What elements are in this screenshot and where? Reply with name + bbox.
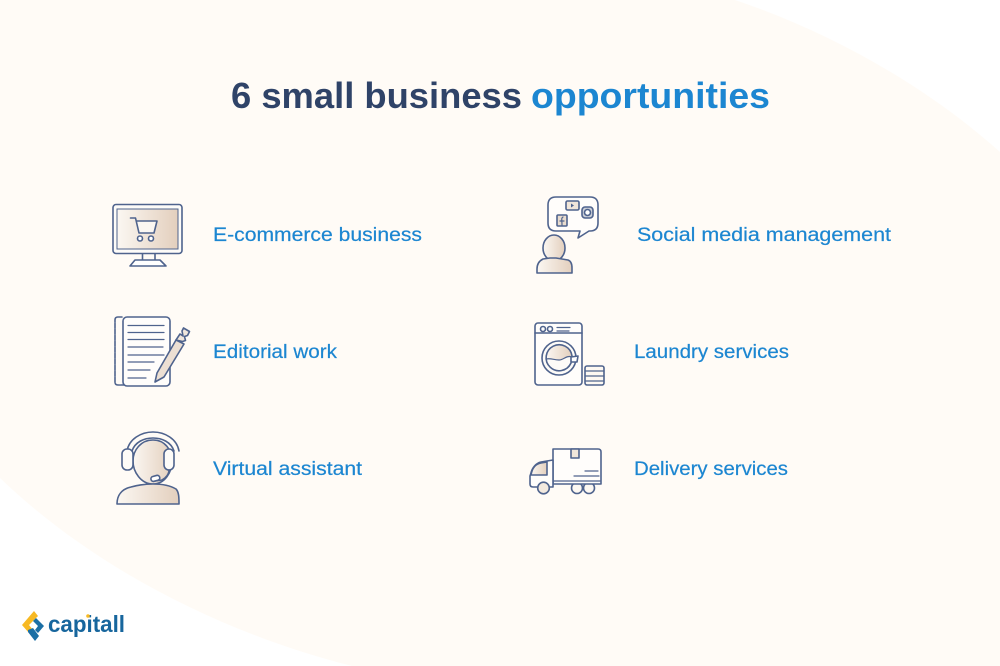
label: Social media management — [637, 225, 892, 246]
logo wordmark: capitall — [48, 611, 125, 637]
icon: delivery truck with box — [530, 449, 601, 494]
label: Delivery services — [634, 459, 788, 480]
title: 6 small business — [231, 75, 522, 116]
item: virtual assistant — [117, 432, 363, 504]
icon: washing machine with towels — [535, 323, 604, 385]
label: Editorial work — [213, 342, 338, 363]
label: E-commerce business — [213, 225, 422, 246]
icon: person with headset — [117, 432, 179, 504]
item: laundry services — [535, 323, 789, 385]
logo dot — [86, 614, 90, 618]
item: social media management — [537, 197, 892, 273]
logo: capitall — [22, 611, 125, 641]
icon: person with speech bubble — [537, 197, 598, 273]
title — [231, 75, 770, 116]
label: Virtual assistant — [213, 459, 363, 480]
label: Laundry services — [634, 342, 789, 363]
item: delivery services — [530, 449, 788, 494]
logo mark — [22, 611, 44, 641]
title: opportunities — [531, 75, 770, 116]
icon: notepad and pencil — [115, 317, 190, 386]
item: editorial work — [115, 317, 338, 386]
icon: computer with shopping cart — [113, 204, 182, 266]
item: e-commerce business — [113, 204, 422, 266]
